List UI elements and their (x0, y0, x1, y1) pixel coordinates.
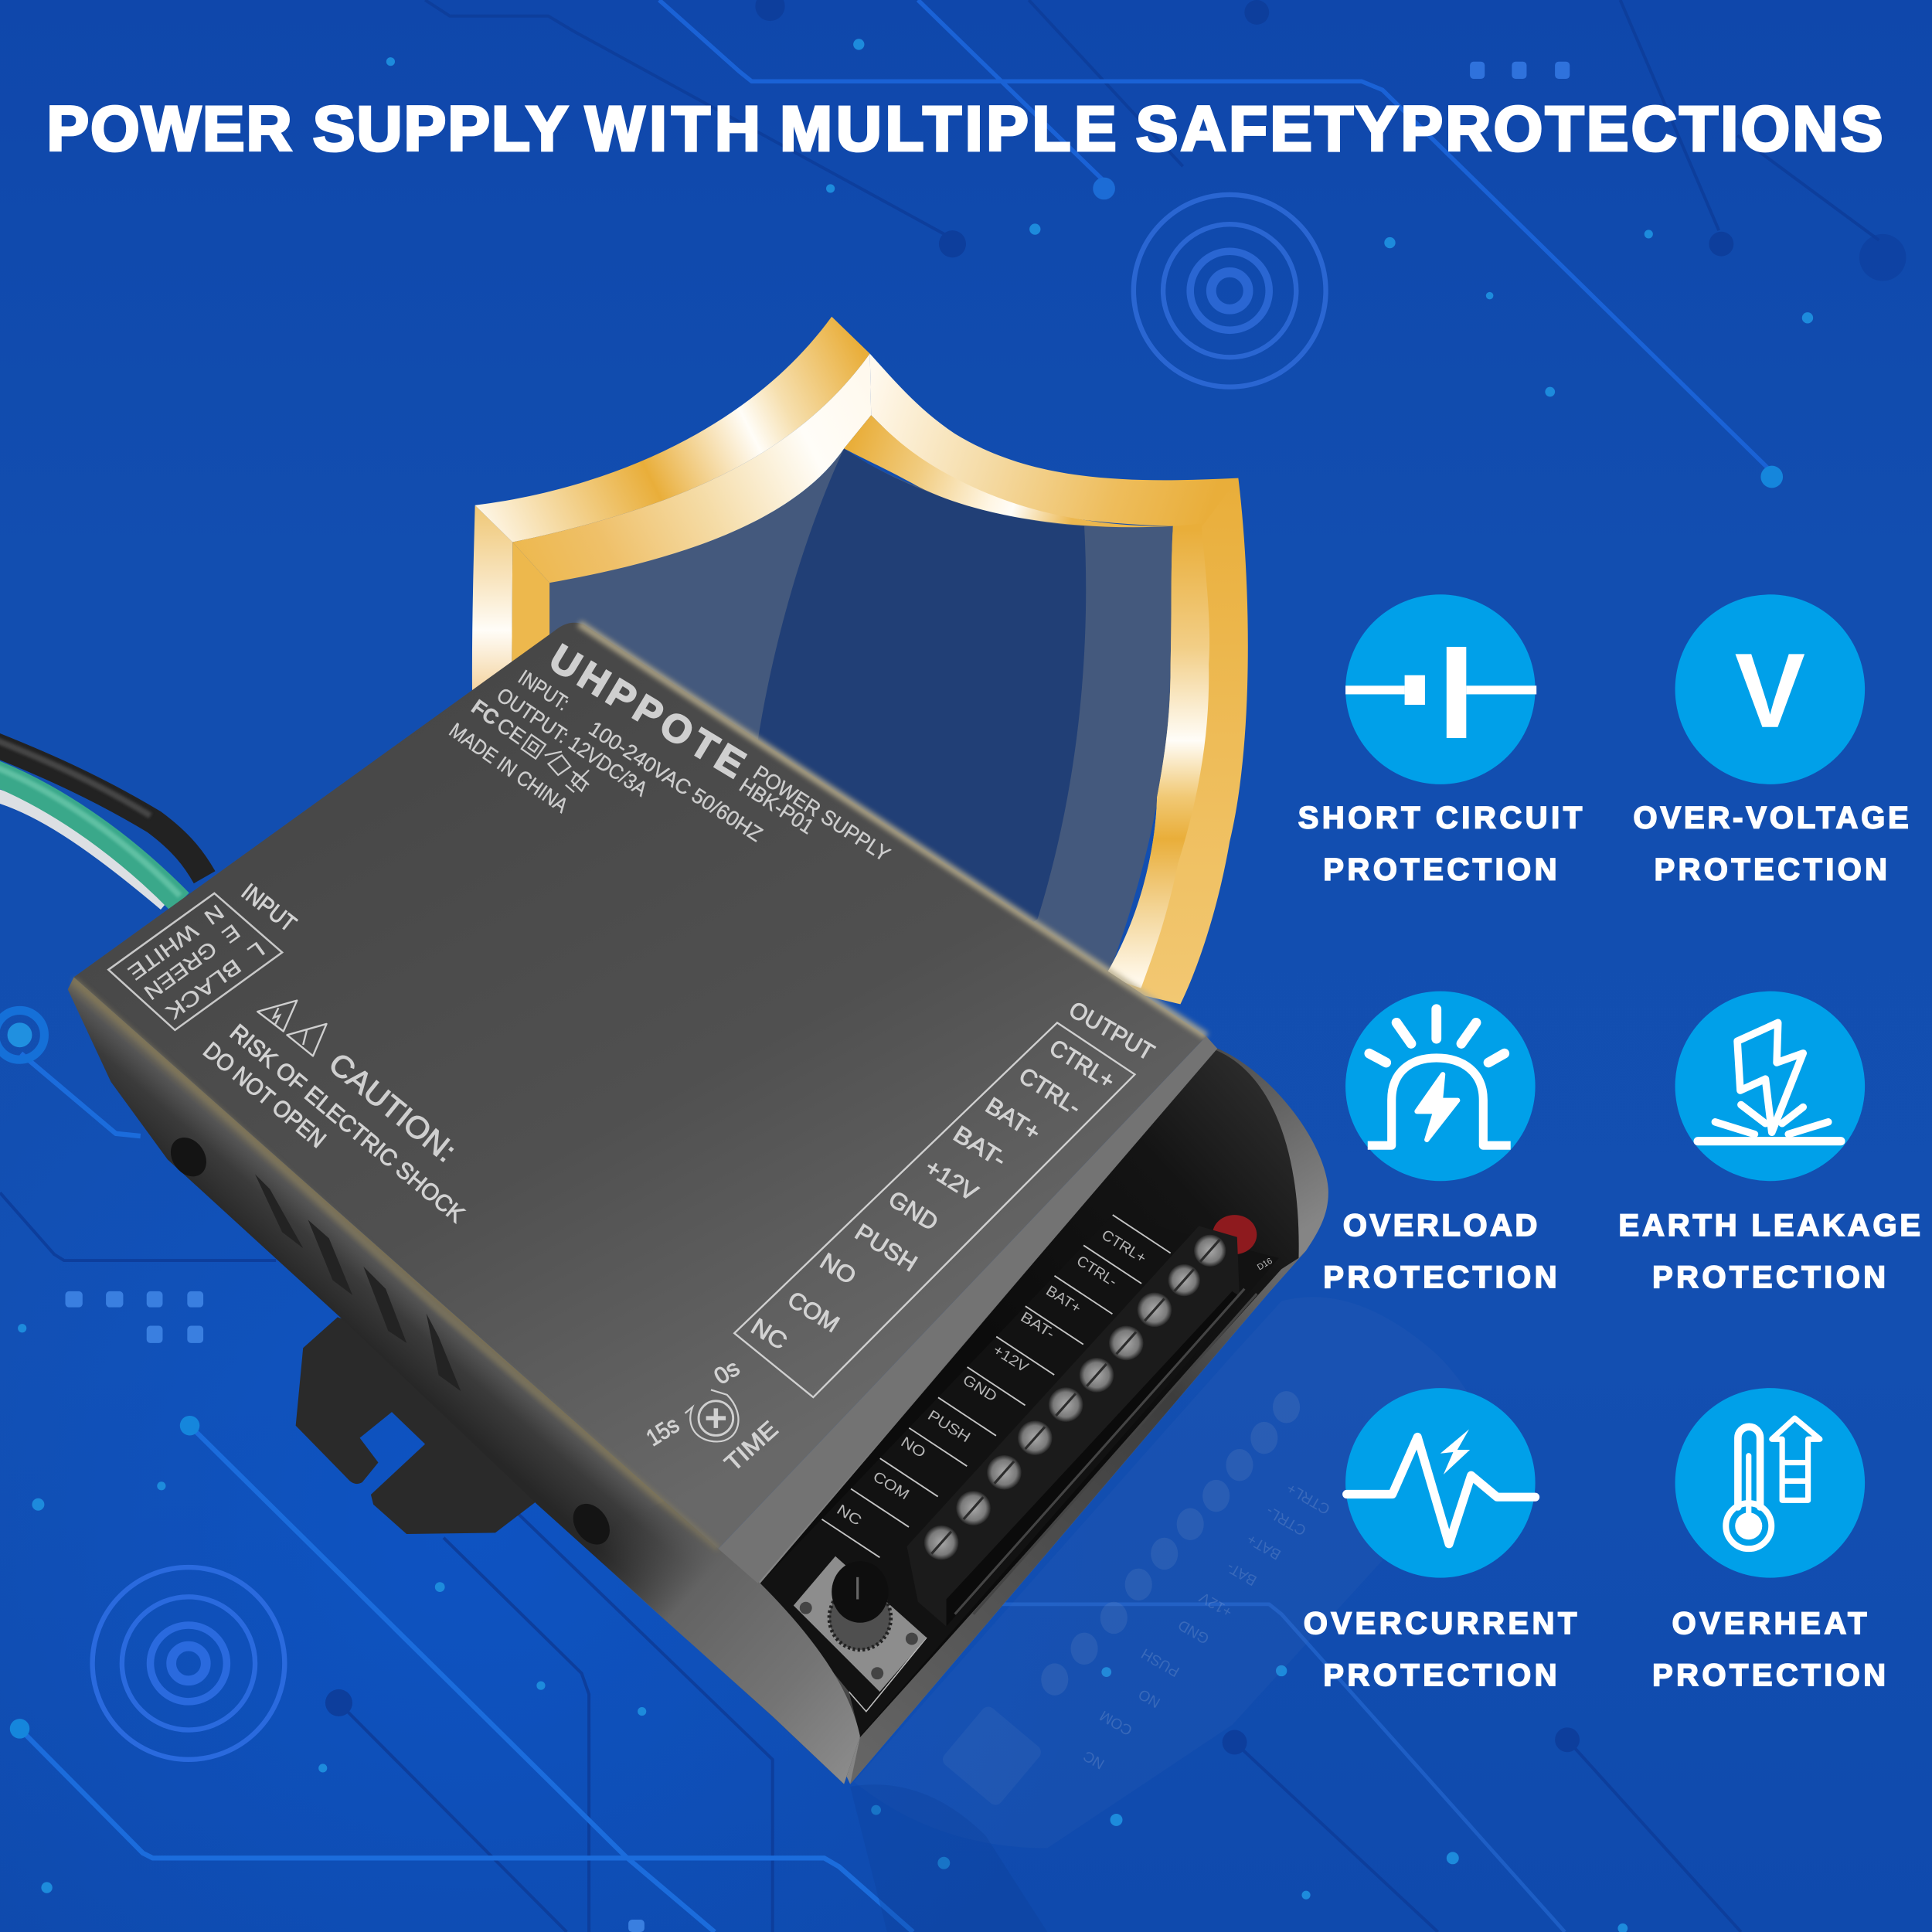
circuit board with terminal labels: NC (834, 1502, 864, 1529)
protection item: overload (1323, 992, 1557, 1294)
input wiring box (108, 879, 301, 1030)
protection item: earth leakage (1619, 992, 1920, 1294)
output terminal legend: NO (815, 1249, 860, 1290)
circuit board with terminal labels: COM (870, 1468, 912, 1503)
caution warning: RISK OF ELECTRIC SHOCK (225, 1019, 469, 1228)
protection item: earth leakage: EARTH LEAKAGE (1619, 1209, 1920, 1243)
time dial: 15s (642, 1412, 684, 1451)
product reflection: NO (1136, 1685, 1163, 1710)
output terminal legend: CTRL+ (1045, 1035, 1119, 1094)
title: WITH (585, 94, 760, 165)
product reflection: CTRL- (1264, 1502, 1309, 1539)
protection item: overheat: OVERHEAT (1672, 1607, 1866, 1641)
output terminal legend: OUTPUT (1064, 997, 1158, 1066)
product label text: 100-240VAC 50/60HZ (584, 716, 767, 846)
title (47, 94, 1883, 165)
icon: alarm dome with bolt (1368, 1009, 1511, 1145)
product label text: OUTPUT: 12VDC/3A (492, 682, 652, 801)
product label text: INPUT: (514, 665, 573, 715)
icon: current spike with bolt (1347, 1429, 1536, 1544)
output terminal legend: NC (747, 1314, 791, 1355)
icon: thermometer with up arrow (1726, 1418, 1820, 1549)
icon: letter V: V (1735, 632, 1805, 750)
input wiring box: INPUT (236, 879, 301, 937)
right end cap shell (758, 1036, 1328, 1784)
product label text (445, 635, 894, 866)
terminal block with screws (906, 1226, 1257, 1627)
circuit board with terminal labels: D16 (1256, 1257, 1274, 1272)
product label text: MADE IN CHINA (445, 718, 573, 818)
power supply device (68, 623, 1328, 1784)
protection item: overload: PROTECTION (1323, 1260, 1557, 1294)
circuit board with terminal labels: GND (960, 1372, 999, 1405)
product reflection: +12V (1197, 1588, 1235, 1620)
protection item: overcurrent: PROTECTION (1323, 1658, 1557, 1692)
time dial: TIME (720, 1417, 783, 1477)
red LED (1213, 1215, 1257, 1254)
circuit board with terminal labels: CTRL+ (1098, 1227, 1149, 1267)
product reflection: PUSH (1139, 1645, 1182, 1679)
product reflection: NC (1080, 1747, 1107, 1772)
shield (472, 317, 1248, 1035)
dark interior (760, 1049, 1299, 1737)
output terminal legend (734, 997, 1158, 1397)
circuit board with terminal labels: BAT- (1018, 1309, 1057, 1342)
protection item: short circuit (1298, 594, 1582, 886)
circuit board with terminal labels: CTRL- (1073, 1253, 1120, 1291)
certification marks: FC (468, 694, 504, 730)
top face (74, 623, 1206, 1549)
product reflection: CTRL+ (1284, 1479, 1333, 1517)
title: POWER SUPPLY (47, 94, 568, 165)
protection item: overheat: PROTECTION (1652, 1658, 1886, 1692)
circuit board with terminal labels: BAT+ (1043, 1283, 1083, 1317)
title: MULTIPLE (780, 94, 1117, 165)
certification marks: CE (492, 713, 530, 749)
title: SAFETYPROTECTIONS (1136, 94, 1883, 165)
circuit board with terminal labels: +12V (990, 1342, 1031, 1376)
product reflection: BAT- (1224, 1559, 1260, 1588)
time dial: 0s (709, 1355, 744, 1390)
product reflection: BAT+ (1244, 1530, 1284, 1563)
protection item: overcurrent: OVERCURRENT (1304, 1607, 1577, 1641)
ventilation slots (255, 1174, 461, 1391)
top edge glow (579, 624, 1206, 1036)
fold highlight (74, 980, 719, 1549)
front end cap (579, 1501, 860, 1784)
caution warning: DO NOT OPEN (199, 1038, 330, 1153)
output terminal legend: PUSH (850, 1219, 921, 1277)
circuit board with terminal labels: NO (898, 1434, 928, 1461)
product label text: HBK-P01 (735, 773, 818, 838)
protection item: over-voltage: OVER-VOLTAGE (1634, 801, 1909, 835)
side screws (163, 1131, 617, 1552)
output terminal legend: COM (783, 1287, 843, 1338)
circuit board with terminal labels (760, 1215, 1279, 1736)
product label text: UHPPOTE (543, 635, 753, 786)
protection item: overload: OVERLOAD (1343, 1209, 1537, 1243)
lower rim strip (850, 1250, 1306, 1784)
output terminal legend: CTRL- (1014, 1063, 1085, 1121)
protection item: earth leakage: PROTECTION (1652, 1260, 1886, 1294)
icon: capacitor symbol (1345, 647, 1536, 738)
protection item: overheat (1652, 1388, 1886, 1692)
protection item: overcurrent (1304, 1388, 1577, 1692)
product reflection: COM (1097, 1707, 1135, 1738)
input wiring box: E GREEN (140, 920, 245, 1005)
side panel (68, 977, 860, 1784)
input wiring box: N WHITE (124, 900, 229, 985)
mounting bracket (296, 1317, 537, 1534)
output terminal legend: BAT- (949, 1121, 1010, 1173)
power cable wires (0, 740, 205, 904)
time adjustment potentiometer (794, 1556, 927, 1692)
protection item: short circuit: PROTECTION (1323, 852, 1557, 886)
protection item: over-voltage: PROTECTION (1655, 852, 1887, 886)
concentric ring top right (1134, 195, 1326, 387)
protection item: short circuit: SHORT CIRCUIT (1298, 801, 1582, 835)
certification marks (468, 694, 589, 792)
circuit board with terminal labels: PUSH (924, 1407, 973, 1446)
output terminal legend: +12V (920, 1155, 982, 1206)
protection item: over-voltage (1634, 594, 1909, 886)
product label text: POWER SUPPLY (749, 760, 894, 866)
caution warning: CAUTION: (322, 1046, 462, 1169)
output terminal legend: GND (884, 1186, 942, 1236)
time dial (642, 1355, 783, 1477)
front lip (719, 1036, 1217, 1583)
product reflection (850, 1297, 1491, 1932)
product reflection: GND (1175, 1616, 1213, 1647)
output terminal legend: BAT+ (981, 1093, 1045, 1146)
icon: lightning strike to ground (1698, 1022, 1841, 1141)
input wiring box: L BLACK (162, 937, 270, 1025)
